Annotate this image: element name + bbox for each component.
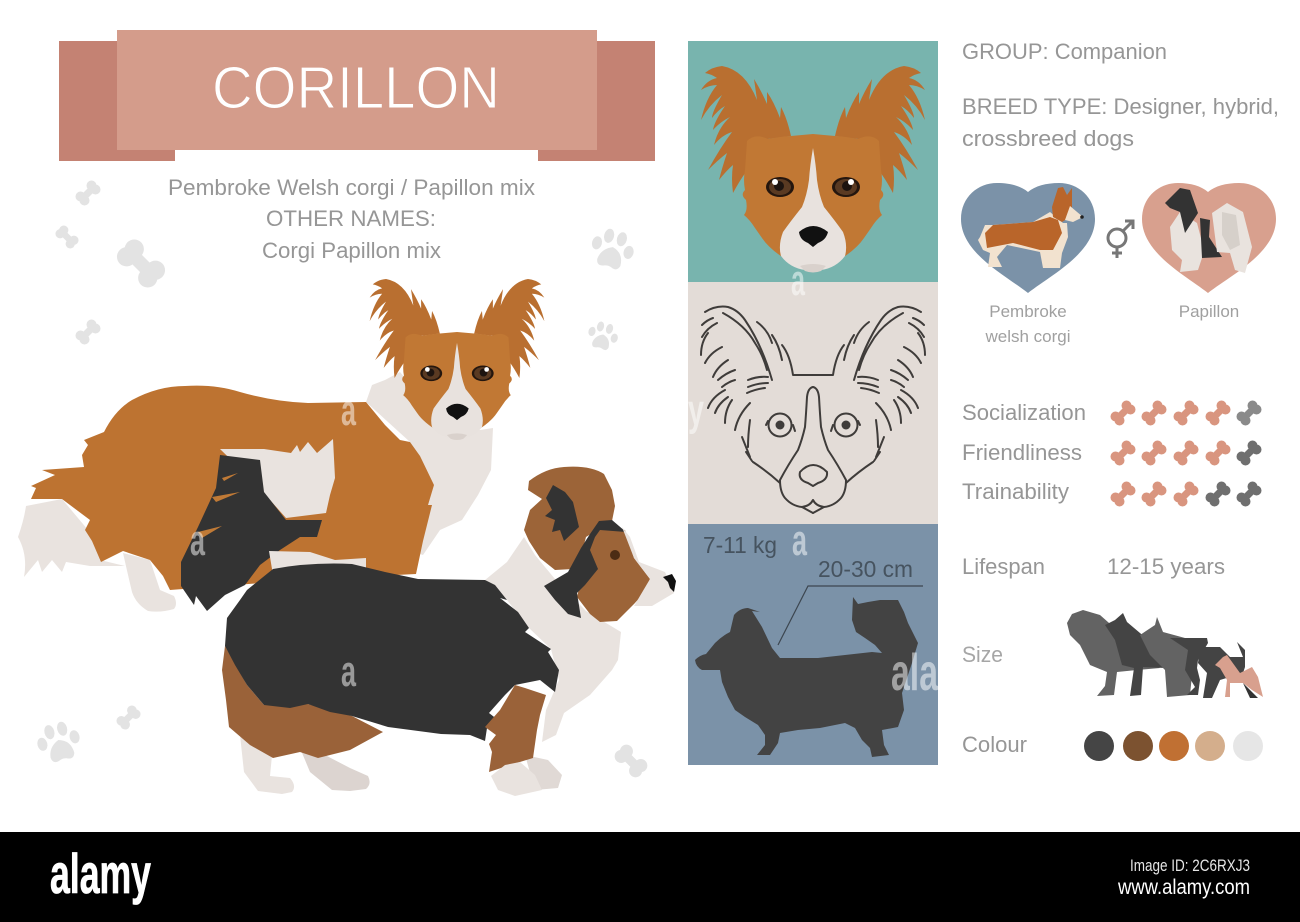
parent heart: Pembroke welsh corgi (961, 183, 1095, 293)
parent labels (984, 302, 1239, 346)
lifespan: 12-15 years (1107, 554, 1225, 579)
dog silhouette (695, 597, 918, 757)
parent heart: Papillon (1142, 183, 1276, 293)
breed info text: crossbreed dogs (962, 126, 1134, 151)
height leader line (778, 586, 923, 645)
parent labels: welsh corgi (984, 327, 1071, 346)
face (577, 527, 650, 622)
colour swatches (1084, 731, 1263, 761)
chest (366, 372, 493, 555)
image id: Image ID: 2C6RXJ3 (1130, 856, 1250, 875)
title: CORILLON (212, 55, 500, 121)
front leg (485, 685, 546, 772)
snout (622, 527, 674, 606)
alamy logo: alamy (50, 842, 151, 905)
breed description text (168, 175, 535, 263)
breed info text: BREED TYPE: Designer, hybrid, (962, 94, 1279, 119)
panel: line art portrait (688, 282, 938, 524)
trait labels: Socialization (962, 400, 1086, 425)
rating: trainability (1110, 482, 1262, 506)
far hind leg (300, 748, 370, 791)
breed description text: Corgi Papillon mix (262, 238, 441, 263)
orange body (31, 386, 434, 590)
ear (524, 467, 615, 570)
trait labels: Friendliness (962, 440, 1082, 465)
head portrait (701, 66, 925, 272)
height label: 20-30 cm (818, 556, 913, 582)
breed info text (962, 39, 1279, 151)
tail white (18, 499, 125, 577)
website: www.alamy.com (1117, 876, 1250, 899)
lifespan: Lifespan (962, 554, 1045, 579)
black body (225, 564, 559, 741)
head (370, 279, 544, 440)
eye (610, 550, 620, 560)
weight label: 7-11 kg (703, 532, 777, 558)
footer bar (0, 832, 1300, 922)
decorative bones and paws (33, 180, 647, 777)
rating: socialization (1110, 400, 1262, 426)
watermark glyphs: a (791, 256, 805, 305)
mask (544, 520, 626, 618)
watermark glyphs: a (190, 516, 205, 565)
far front paw (525, 755, 562, 790)
watermark glyphs: y (688, 386, 704, 435)
rear leg (123, 553, 176, 612)
panel: size and weight (688, 524, 938, 765)
size comparison silhouettes (1067, 610, 1263, 698)
dog: orange corillon standing (18, 279, 544, 612)
rear leg white (240, 735, 294, 794)
white side patch (220, 439, 335, 518)
size label: Size (962, 642, 1003, 667)
nose (663, 574, 676, 592)
watermark glyphs: a (341, 647, 356, 696)
watermark glyphs: a (341, 386, 356, 435)
trait labels: Trainability (962, 479, 1069, 504)
back white patch (269, 551, 366, 575)
gender symbol (1108, 221, 1133, 258)
parent labels: Papillon (1179, 302, 1239, 321)
parent labels: Pembroke (989, 302, 1067, 321)
watermark glyphs: ala (891, 644, 939, 702)
trait labels (962, 400, 1086, 504)
breed description text: OTHER NAMES: (266, 206, 436, 231)
breed description text: Pembroke Welsh corgi / Papillon mix (168, 175, 535, 200)
watermark glyphs (190, 256, 939, 702)
white chest (485, 537, 621, 742)
brown belly (222, 646, 383, 758)
dog: black and tan corillon in profile (222, 467, 676, 796)
front paw (491, 762, 542, 796)
breed info text: GROUP: Companion (962, 39, 1167, 64)
rating: friendliness (1110, 440, 1262, 466)
lifespan (962, 554, 1225, 579)
dog2 tail (181, 455, 322, 611)
title banner (59, 30, 655, 161)
colour label: Colour (962, 732, 1027, 757)
line drawing (701, 307, 925, 513)
panel: colour portrait (688, 41, 938, 282)
watermark glyphs: a (792, 516, 807, 565)
